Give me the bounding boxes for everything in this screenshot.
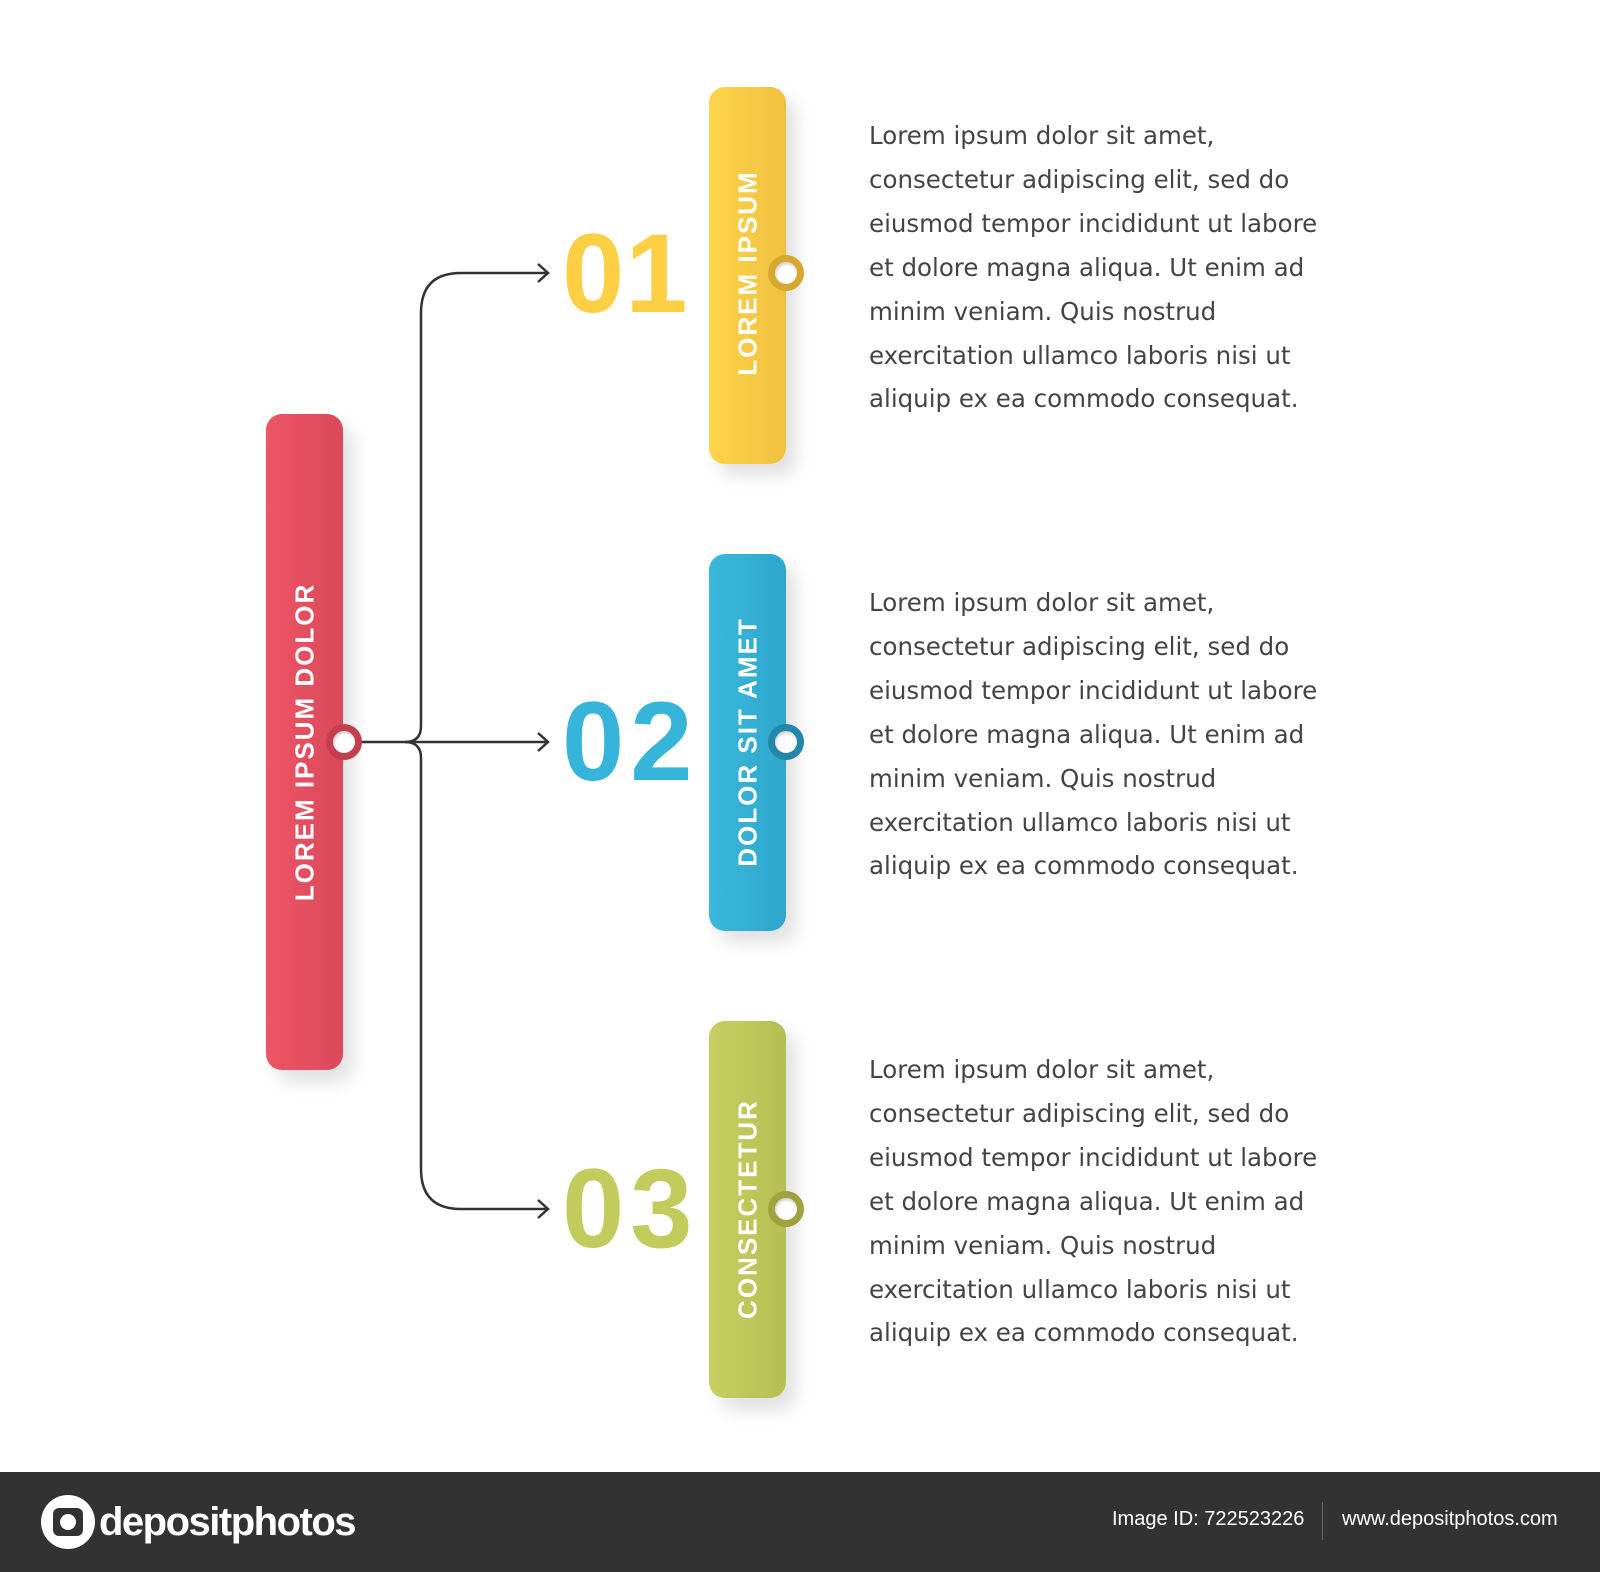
number 02: 02 bbox=[562, 679, 699, 804]
footer url: www.depositphotos.com bbox=[1342, 1508, 1558, 1530]
bar: yellow: LOREM IPSUM bbox=[732, 170, 762, 376]
number 01: 01 bbox=[562, 211, 689, 336]
red dot bbox=[326, 724, 362, 760]
yellow dot bbox=[768, 255, 804, 291]
footer id: Image ID: 722523226 bbox=[1112, 1508, 1304, 1530]
blue dot bbox=[768, 724, 804, 760]
bar: green: CONSECTETUR bbox=[732, 1099, 762, 1319]
footer bbox=[0, 1472, 1600, 1572]
footer logo: depositphotos bbox=[99, 1500, 355, 1544]
bar: blue bbox=[709, 554, 786, 931]
text 2: Lorem ipsum dolor sit amet, consectetur adipiscing elit, sed do eiusmod tempor incididunt ut labore et dolore magna aliqua. Ut enim ad minim veniam. Quis nostrud exercitation ullamco laboris nisi ut aliquip ex ea commodo consequat. bbox=[869, 588, 1317, 880]
text 3: Lorem ipsum dolor sit amet, consectetur adipiscing elit, sed do eiusmod tempor incididunt ut labore et dolore magna aliqua. Ut enim ad minim veniam. Quis nostrud exercitation ullamco laboris nisi ut aliquip ex ea commodo consequat. bbox=[869, 1055, 1317, 1347]
bar: green bbox=[709, 1021, 786, 1398]
main bar: red bbox=[266, 414, 343, 1070]
green dot bbox=[768, 1191, 804, 1227]
bar: blue: DOLOR SIT AMET bbox=[732, 617, 762, 867]
main bar: red: LOREM IPSUM DOLOR bbox=[289, 583, 319, 901]
footer logo bbox=[41, 1495, 355, 1549]
number 03: 03 bbox=[562, 1146, 699, 1271]
bar: yellow bbox=[709, 87, 786, 464]
text 1: Lorem ipsum dolor sit amet, consectetur adipiscing elit, sed do eiusmod tempor incididunt ut labore et dolore magna aliqua. Ut enim ad minim veniam. Quis nostrud exercitation ullamco laboris nisi ut aliquip ex ea commodo consequat. bbox=[869, 121, 1317, 413]
